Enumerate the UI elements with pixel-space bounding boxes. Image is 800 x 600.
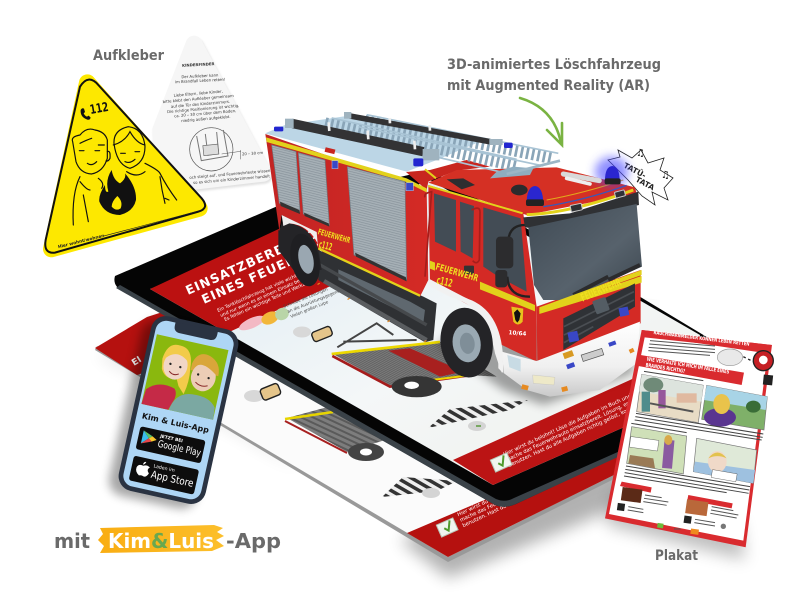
grille xyxy=(563,283,635,350)
screen footer text: mache das Feuerwehrauto einsatzbereit. Lösung, erfahre, was gemeinsam xyxy=(505,376,683,463)
Google Play badge: JETZT BEI xyxy=(159,433,184,444)
siren sound burst: TATÜ- xyxy=(622,161,648,180)
marker lamps on visor xyxy=(570,190,626,212)
red header band on screen xyxy=(150,205,410,333)
comic caption two xyxy=(624,423,750,493)
sticker flame xyxy=(99,170,136,215)
screen intro text: Ein Tanklöschfahrzeug hat viele wichtige Teile an Bord, xyxy=(216,257,334,314)
cab lower stripe xyxy=(430,261,535,311)
box end red top xyxy=(406,160,490,190)
screen footer text: Hier wirst du belohnt! Löse die Aufgaben im Buch und kontrolliere deine Lösung. xyxy=(502,364,695,458)
wiper xyxy=(573,265,640,295)
roof xyxy=(265,116,480,172)
cab door lettering: c112 xyxy=(435,274,454,290)
label: AR fire truck: 3D-animiertes Löschfahrzeug xyxy=(447,57,661,73)
screen check icon xyxy=(490,453,512,472)
plate and small bumper lights xyxy=(563,341,635,369)
poster paper xyxy=(609,337,768,541)
cab door outlines xyxy=(425,192,480,277)
windscreen frame xyxy=(523,192,639,228)
poster: BRANDES RICHTIG? xyxy=(645,363,685,375)
front wheel xyxy=(436,304,497,381)
blue glow xyxy=(595,157,628,187)
windows xyxy=(434,193,527,292)
sticker back side: so es sich um ein Kinderzimmer handelt xyxy=(193,173,271,185)
poster: WIE VERHALTE ICH MICH IM FALLE EINES xyxy=(646,357,730,376)
screen exercise text: an die Ausrüstungsgegenstände xyxy=(287,284,352,314)
poster top banner xyxy=(642,330,772,353)
screen intro text: Es fehlen ein wichtige Teile und Werkzeuge. xyxy=(223,276,318,323)
front yellow stripes xyxy=(539,270,642,314)
siren sound burst xyxy=(608,148,673,205)
brand line: mit Kim&Luis-App: Kim&Luis xyxy=(108,529,214,553)
screen doodle numbers xyxy=(237,306,291,333)
book body text: mache das Feuerwehrauto einsatzbereit. Löse die Aufgaben richtig xyxy=(459,445,619,524)
sticker back side: auf die Tür des Kinderzimmers. xyxy=(171,99,230,109)
Google Play badge: Google Play xyxy=(157,439,202,459)
rear arch white xyxy=(282,215,318,243)
Google Play badge xyxy=(136,426,206,463)
cab door lettering xyxy=(434,262,479,290)
shutters xyxy=(272,145,407,281)
cab roof xyxy=(428,167,637,215)
eagle emblem: 10/64 xyxy=(508,330,527,338)
sticker back side: Der Aufkleber kann xyxy=(181,72,219,79)
bumper xyxy=(502,322,640,397)
book check icon xyxy=(436,518,458,537)
front arch xyxy=(457,297,503,373)
siren sound burst: ♫ xyxy=(636,148,645,159)
red footer band on screen xyxy=(453,352,692,485)
sticker back side: niedrig außen aufgeklebt. xyxy=(181,114,231,123)
App Store badge: App Store xyxy=(150,469,195,490)
poster xyxy=(605,329,773,547)
box lower yellow stripe xyxy=(318,248,420,296)
siren sound burst: TATA xyxy=(634,175,656,192)
screen heading: EINES FEUERWEHRAUTOS xyxy=(199,211,389,307)
phone with app xyxy=(106,311,241,513)
book printed truck xyxy=(244,390,440,498)
screen intro text: und nur wenn es an einem Einsatz bereit ist, kann es xyxy=(219,263,334,319)
box side lettering: FEUERWEHR xyxy=(317,227,351,245)
cab door lettering: FEUERWEHR xyxy=(434,262,479,284)
comic panel two xyxy=(702,385,767,430)
App Store badge xyxy=(129,455,199,495)
screen heading: EINSATZBEREITSCHAFT xyxy=(183,210,356,298)
windscreen xyxy=(528,204,642,300)
sticker children xyxy=(72,127,177,225)
sticker emergency number: 112 xyxy=(89,99,110,117)
poster intro text xyxy=(648,341,715,355)
comic panel three xyxy=(627,427,687,474)
roof tubes xyxy=(285,115,503,155)
sticker back side: ca. 20 – 30 cm über dem Boden, xyxy=(174,108,236,118)
white lower cab xyxy=(428,278,502,373)
label: poster: Plakat xyxy=(655,548,698,564)
cab roof details xyxy=(447,178,475,189)
box side lettering: c112 xyxy=(318,240,333,253)
sticker back side: im Brandfall Leben retten! xyxy=(175,77,226,84)
screen exercise text: Schreibe die Lösungen xyxy=(283,286,329,309)
tablet xyxy=(114,170,720,507)
label: sticker: Aufkleber xyxy=(93,48,164,64)
poster bottom tips right xyxy=(684,495,738,529)
eagle emblem xyxy=(508,307,527,338)
sticker back side: Liebe Eltern, liebe Kinder, xyxy=(173,89,223,98)
screen footer text: benutzen. Hast du alle Aufgaben richtig gelöst, kontrolliere es. xyxy=(508,395,658,469)
chassis xyxy=(318,250,437,342)
rear arch dark xyxy=(278,223,322,270)
sticker address line: Hier wohnt/wohnen xyxy=(57,233,105,250)
front lettering band: FEUERWEHR xyxy=(579,276,623,304)
screen hatched floor xyxy=(428,400,528,428)
poster footer logos xyxy=(657,523,699,535)
front panel xyxy=(537,270,641,362)
fire truck with AR xyxy=(265,115,642,405)
brand line: mit Kim&Luis-App: mit xyxy=(54,529,90,553)
comic panel four xyxy=(693,438,757,483)
box side lettering xyxy=(317,227,351,253)
book hatched floor xyxy=(382,477,457,497)
brand line: mit Kim&Luis-App: -App xyxy=(226,529,281,553)
label: AR fire truck: mit Augmented Reality (AR) xyxy=(447,78,650,94)
sticker back side: och steigt auf, und Feuerwehrleute wissen xyxy=(189,168,271,180)
book under the tablet: EI xyxy=(130,355,144,369)
screen character icon xyxy=(293,326,333,342)
book body text: Hier wirst du belohnt! Löse die Aufgaben im Buch und kontrolliere xyxy=(457,440,614,518)
ladder xyxy=(318,115,560,178)
sticker front xyxy=(45,80,205,253)
poster QR code xyxy=(763,375,773,385)
cab top yellow stripe xyxy=(428,186,523,213)
sticker back side: Die richtige Positionierung ist wichtig, xyxy=(167,103,239,114)
book body text: benutzen. Hast du alle Aufgaben richtig gelöst, kannst du es sehen. xyxy=(462,449,624,529)
poster bottom tips left xyxy=(617,482,668,513)
ground shadows xyxy=(95,340,745,578)
sticker back side: 20 – 30 cm xyxy=(242,150,264,156)
sticker back side: bitte klebt den Aufkleber gemeinsam xyxy=(162,93,234,104)
book under the tablet xyxy=(95,250,660,562)
App Store badge: Laden im xyxy=(153,463,176,474)
screen exercise text: Vielen großen Lupe xyxy=(290,299,329,319)
siren sound burst: ♫ xyxy=(661,170,670,181)
comic caption one xyxy=(635,371,763,440)
book printed character xyxy=(259,383,282,401)
sticker back side xyxy=(161,44,271,187)
door handle xyxy=(464,266,474,274)
air horns xyxy=(563,174,599,184)
poster: RAUCHWARNMELDER KÖNNEN LEBEN RETTEN xyxy=(653,329,750,348)
corner bumper lamp block xyxy=(507,355,568,392)
sticker emergency number xyxy=(81,99,110,120)
app name: Kim & Luis-App xyxy=(141,411,210,435)
blue beacons xyxy=(526,166,621,206)
screen printed truck xyxy=(332,323,497,397)
box yellow stripe xyxy=(266,137,427,192)
brand line: mit Kim&Luis-App xyxy=(54,525,281,553)
poster section banner xyxy=(638,355,744,385)
label: AR fire truck xyxy=(447,57,661,94)
side mirror xyxy=(495,225,530,297)
cab side xyxy=(428,185,537,362)
poster smoke detector icon xyxy=(717,349,773,371)
arrow: to fire truck xyxy=(520,98,562,145)
box body side xyxy=(265,134,428,297)
comic panel one xyxy=(637,374,703,423)
sticker back side: KINDERFINDER xyxy=(182,61,215,68)
rear blue lights xyxy=(274,127,513,166)
box small blue markers xyxy=(332,161,413,191)
rear wheel xyxy=(286,231,324,289)
app artwork: kids xyxy=(141,334,228,420)
tablet screen xyxy=(150,180,700,485)
